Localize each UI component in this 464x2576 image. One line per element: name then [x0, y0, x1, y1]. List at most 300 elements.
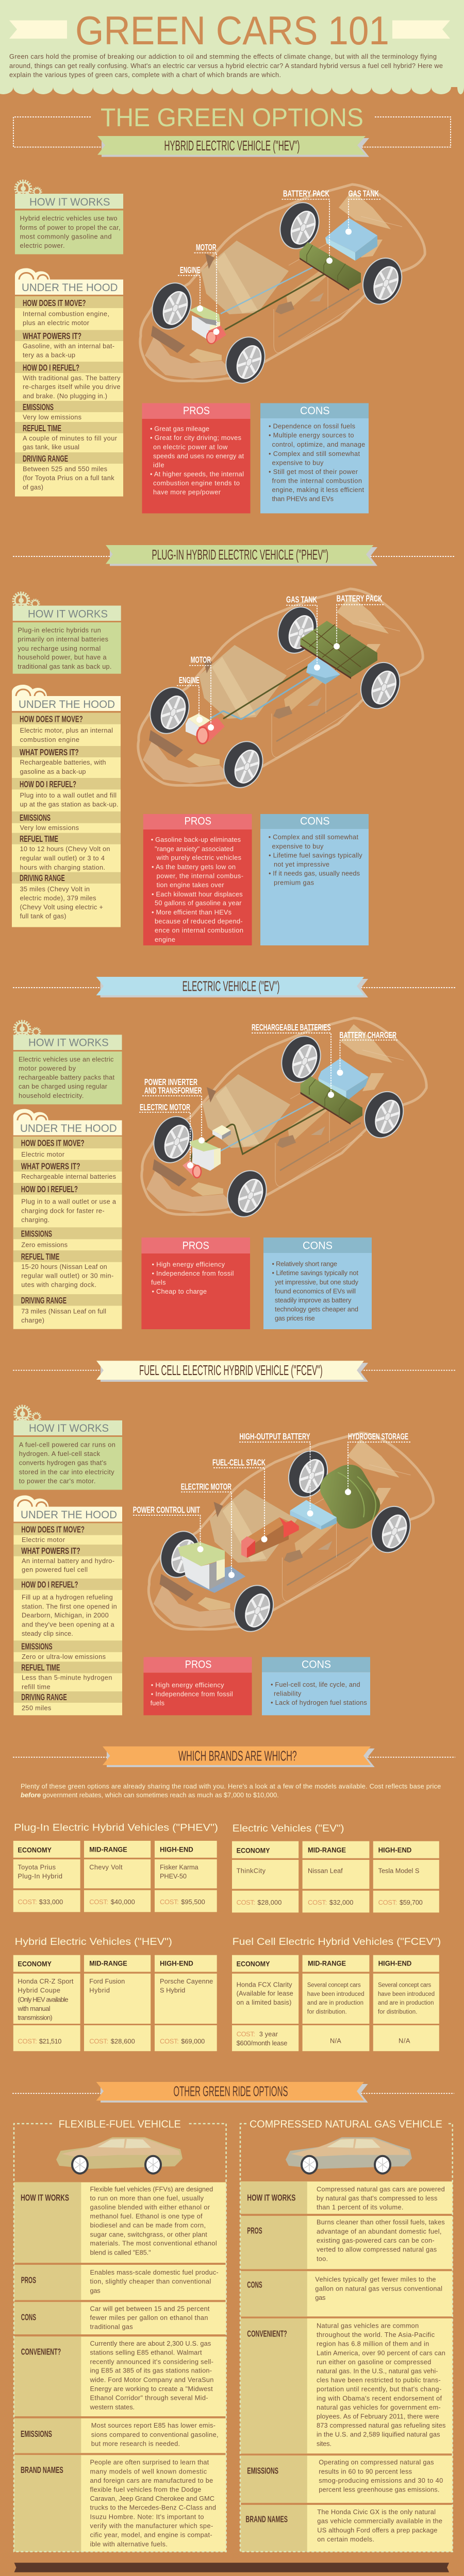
callout: battery charger: BATTERY CHARGER — [339, 1030, 396, 1040]
panel: compressed natural gas vehicle — [240, 2119, 453, 2552]
component: battery pack — [301, 621, 377, 679]
panel: HEV under the hood: DRIVING RANGE — [23, 453, 68, 464]
rows: flex-fuel table: stations selling E85 ethanol. Walmart — [90, 2349, 202, 2357]
callout: electric motor — [139, 1102, 193, 1168]
table: PHEV brands: COST: — [89, 1898, 108, 1906]
panel: EV under the hood: REFUEL TIME — [21, 1251, 59, 1262]
rows: CNG table: on certain models. — [317, 2535, 374, 2543]
panel: HEV under the hood: HOW DOES IT MOVE? — [23, 298, 86, 308]
rows: flex-fuel table: Isuzu Hombre. Note: It's important to — [90, 2513, 204, 2520]
panel: EV under the hood: WHAT POWERS IT? — [21, 1161, 80, 1171]
banner: plug-in hybrid electric vehicle: PLUG-IN HYBRID ELECTRIC VEHICLE ("PHEV") — [152, 547, 328, 563]
icon: CNG car — [286, 2137, 412, 2174]
panel: FCEV cons: • Fuel-cell cost, life cycle, and — [271, 1681, 360, 1688]
rows: flex-fuel table: materials. The most conventional ethanol — [90, 2240, 217, 2247]
callout: engine — [177, 675, 203, 723]
rows: flex-fuel table: blend is called "E85." — [90, 2248, 151, 2256]
heading: CNG: COMPRESSED NATURAL GAS VEHICLE — [250, 2119, 442, 2130]
rows: CNG table: CONS — [247, 2280, 262, 2290]
panel: FCEV under the hood: refill time — [22, 1683, 51, 1690]
table: PHEV brands — [13, 1823, 218, 1912]
rows: CNG table: gas vehicle commercially available in the — [317, 2517, 442, 2525]
panel: HEV cons: • Still get most of their power — [269, 468, 358, 476]
panel: PHEV under the hood: WHAT POWERS IT? — [20, 747, 79, 757]
panel: PHEV cons: CONS — [300, 815, 330, 827]
table: FCEV brands: ECONOMY — [237, 1960, 270, 1968]
panel: EV under the hood: Plug in to a wall outlet or use a — [21, 1198, 117, 1206]
panel: HEV pros: • Great for city driving; moves — [150, 434, 241, 442]
rows: CNG table: by natural gas that's compressed to less — [317, 2194, 437, 2202]
callout: hydrogen storage: HYDROGEN STORAGE — [348, 1431, 408, 1442]
banner: other green ride options: OTHER GREEN RIDE OPTIONS — [173, 2083, 288, 2099]
panel: FCEV under the hood: Fill up at a hydrogen refueling — [22, 1594, 113, 1601]
banner: hybrid electric vehicle — [97, 136, 369, 157]
banner: hybrid electric vehicle: HYBRID ELECTRIC VEHICLE ("HEV") — [164, 138, 300, 154]
component: fuel-cell stack — [241, 1517, 299, 1558]
rows: CNG table: throughout the world. The Asia-Pacific — [317, 2331, 435, 2338]
rows: flex-fuel table: recently announced it's considering sell- — [90, 2358, 213, 2365]
table: PHEV brands: ECONOMY — [18, 1845, 52, 1854]
table: PHEV brands: MID-RANGE — [89, 1845, 127, 1853]
callout: engine: ENGINE — [180, 265, 201, 275]
panel: PHEV pros: with purely electric vehicles — [156, 854, 241, 861]
table: EV brands: $59,700 — [400, 1899, 423, 1906]
rows: CNG table: run either on gasoline or compressed — [317, 2358, 431, 2366]
rows: CNG table: Burns cleaner than other fossil fuels, takes — [317, 2218, 445, 2226]
panel: FCEV under the hood: steady clip since. — [22, 1630, 73, 1637]
rows: flex-fuel table: cific year, model, and engine is compat- — [90, 2531, 212, 2539]
panel: EV under the hood — [13, 1109, 122, 1329]
panel: EV how it works: HOW IT WORKS — [28, 1037, 109, 1049]
panel: PHEV how it works: HOW IT WORKS — [28, 608, 108, 620]
panel: FCEV under the hood — [13, 1495, 122, 1715]
rows: flex-fuel table: sions compared to conventional gasoline, — [91, 2431, 219, 2438]
rows: CNG table: CONVENIENT? — [247, 2328, 287, 2338]
rows: CNG table: portation until recently, but that's chang- — [317, 2385, 441, 2393]
table: FCEV brands: N/A — [399, 2037, 410, 2044]
panel: PHEV pros: engine — [155, 936, 175, 943]
panel: PHEV under the hood: 10 to 12 hours (Chevy Volt on — [20, 845, 110, 853]
rows: flex-fuel table: many models of well known domestic — [90, 2467, 207, 2475]
panel: FCEV under the hood: Zero or ultra-low emissions — [22, 1653, 106, 1660]
rows: CNG table: results in 60 to 90 percent less — [319, 2467, 412, 2475]
panel: EV how it works — [13, 1021, 122, 1105]
panel: EV cons: • Lifetime savings typically not — [272, 1269, 358, 1277]
callout: motor: MOTOR — [196, 242, 217, 252]
rows: flex-fuel table: Caravan, Jeep Grand Cherokee and GMC — [90, 2495, 214, 2502]
table: HEV brands: Hybrid Coupe — [18, 1987, 60, 1994]
panel: HEV cons: • Complex and still somewhat — [269, 450, 360, 457]
panel: EV cons: gas prices rise — [275, 1314, 315, 1322]
panel: HEV cons: CONS — [300, 405, 330, 417]
callout: power control unit — [133, 1504, 204, 1552]
panel: EV under the hood: utes with charging dock. — [21, 1281, 96, 1289]
callout: gas tank — [286, 595, 320, 671]
rows: CNG table: smog-producing emissions and 30 to 40 — [319, 2477, 443, 2484]
callout: high-output battery — [239, 1431, 313, 1517]
panel: EV under the hood: Rechargeable internal batteries — [21, 1173, 116, 1180]
panel: PHEV under the hood: DRIVING RANGE — [20, 873, 65, 883]
rows: flex-fuel table: wide. Ford Motor Company and VeraSun — [90, 2376, 213, 2383]
panel: HEV under the hood: Very low emissions — [23, 413, 81, 421]
table: FCEV brands: Several concept cars — [378, 1982, 432, 1989]
table: PHEV brands: Chevy Volt — [89, 1863, 123, 1871]
callout: electric motor — [181, 1482, 235, 1578]
table: PHEV brands: Fisker Karma — [160, 1863, 198, 1871]
component: power control unit — [178, 1542, 245, 1593]
rows: CNG table: EMISSIONS — [247, 2466, 278, 2476]
banner: other green ride options — [12, 2082, 454, 2103]
panel: FCEV under the hood: gen powered fuel cell — [22, 1566, 88, 1573]
panel: EV cons: technology gets cheaper and — [275, 1306, 358, 1313]
component: engine — [190, 305, 220, 341]
component: motor — [197, 718, 225, 744]
panel: FCEV cons: • Lack of hydrogen fuel stations — [271, 1699, 367, 1706]
table: FCEV brands: and are in production — [378, 2000, 434, 2006]
text: brands intro: Plenty of these green options are already sharing the road with you. Here's a look at a few of the models available. Cost reflects base price — [21, 1782, 441, 1790]
panel: PHEV under the hood: gasoline as a back-up — [20, 768, 86, 775]
table: EV brands: COST: — [378, 1899, 397, 1906]
panel: HEV how it works: HOW IT WORKS — [29, 196, 110, 208]
panel: PHEV under the hood: REFUEL TIME — [20, 834, 58, 844]
callout: gas tank — [345, 189, 380, 235]
rows: flex-fuel table: Car will get between 15 and 25 percent — [90, 2304, 210, 2312]
panel: EV cons: found economics of EVs will — [275, 1287, 356, 1295]
table: FCEV brands: $600/month lease — [237, 2039, 287, 2047]
rows: CNG table: 873 compressed natural gas refueling sites — [317, 2421, 445, 2429]
rows: CNG table: too. — [317, 2255, 328, 2262]
table: PHEV brands: $95,500 — [181, 1898, 205, 1906]
rows: flex-fuel table: biodiesel and can be made from corn, — [90, 2222, 206, 2229]
panel: HEV how it works — [15, 181, 123, 255]
title: GREEN CARS 101 — [75, 8, 389, 53]
component: gas tank — [325, 218, 377, 261]
panel: PHEV cons: premium gas — [274, 879, 314, 887]
panel: PHEV how it works: Plug-in electric hybrids run — [18, 626, 101, 634]
panel: FCEV under the hood: An internal battery and hydro- — [22, 1557, 114, 1565]
banner: plug-in hybrid electric vehicle — [13, 545, 455, 566]
rows: CNG table: ing with Obama's recent endorsement of — [317, 2394, 442, 2402]
rows: flex-fuel table — [14, 2182, 226, 2552]
panel: EV how it works: motor powered by — [19, 1064, 76, 1072]
table: FCEV brands: Several concept cars — [307, 1982, 361, 1989]
panel: PHEV pros: PROS — [185, 815, 211, 827]
panel: PHEV pros: 50 gallons of gasoline a year — [155, 899, 242, 907]
table: FCEV brands: have been introduced — [307, 1991, 364, 1997]
panel: EV cons: steadily improve as battery — [275, 1296, 352, 1304]
panel: EV pros: • Independence from fossil — [152, 1269, 234, 1277]
component: transformer — [212, 1125, 231, 1140]
rows: flex-fuel table: sugar cane, switchgrass, or other plant — [90, 2230, 207, 2238]
panel: EV cons: • Relatively short range — [272, 1260, 337, 1268]
panel: HEV cons: • Multiple energy sources to — [269, 431, 354, 439]
panel: FCEV under the hood: EMISSIONS — [21, 1641, 53, 1652]
callout: battery charger — [337, 1030, 397, 1076]
component: gas tank — [306, 656, 340, 684]
panel: PHEV under the hood: regular wall outlet) or 3 to 4 — [20, 854, 105, 862]
callout: electric motor: ELECTRIC MOTOR — [181, 1482, 231, 1492]
panel: EV pros — [141, 1238, 250, 1329]
heading: HEV: Hybrid Electric Vehicles ("HEV") — [15, 1937, 172, 1947]
rows: CNG table: natural gas. In the U.S., natural gas vehi- — [317, 2367, 438, 2375]
rows: CNG table: Natural gas vehicles are common — [317, 2321, 419, 2329]
rows: CNG table: existing gas-powered cars can be con- — [317, 2236, 435, 2244]
panel: HEV pros: combustion engine tends to — [153, 479, 240, 487]
panel: EV under the hood: Electric motor — [21, 1150, 65, 1158]
panel: PHEV pros: • As the battery gets low on — [152, 863, 236, 871]
panel: EV under the hood: 15-20 hours (Nissan Leaf on — [21, 1263, 107, 1270]
table: HEV brands: with manual — [17, 2005, 51, 2012]
callout: power inverter and transformer: POWER INVERTER — [144, 1077, 197, 1087]
heading: EV: Electric Vehicles ("EV") — [233, 1823, 344, 1834]
panel: HEV cons — [260, 403, 369, 513]
panel: HEV cons: engine, making it less efficient — [272, 486, 364, 494]
panel: HEV cons: • Dependence on fossil fuels — [269, 422, 355, 430]
component: battery pack — [300, 242, 361, 291]
panel: FCEV pros: PROS — [185, 1658, 211, 1670]
callout: rechargeable batteries — [252, 1022, 334, 1098]
table: FCEV brands: COST: — [237, 2030, 255, 2038]
table: FCEV brands: Honda FCX Clarity — [237, 1980, 292, 1988]
panel: PHEV how it works: traditional gas tank as back up. — [18, 663, 111, 670]
table: FCEV brands: HIGH-END — [378, 1959, 411, 1968]
panel: PHEV cons: • Complex and still somewhat — [269, 833, 358, 841]
icon: flex-fuel car — [56, 2137, 183, 2174]
panel: PHEV under the hood: combustion engine — [20, 736, 79, 743]
table: FCEV brands: MID-RANGE — [308, 1959, 346, 1968]
intro text: Green cars hold the promise of breaking our addiction to oil and stemming the effects of climate change, but with all the terminology flying — [9, 53, 437, 60]
table: HEV brands: ECONOMY — [18, 1960, 52, 1968]
component: rechargeable batteries — [301, 1076, 362, 1125]
table: FCEV brands: 3 year — [259, 2030, 278, 2038]
callout: engine — [178, 265, 203, 312]
rows: flex-fuel table: but more research is needed. — [91, 2440, 180, 2448]
callout: fuel-cell stack: FUEL-CELL STACK — [212, 1457, 266, 1467]
panel: FCEV how it works: to power the car's motor. — [19, 1477, 95, 1485]
panel: FCEV under the hood: HOW DO I REFUEL? — [21, 1579, 78, 1589]
rows: CNG table: percent less greenhouse gas emissions. — [319, 2485, 439, 2493]
rows: flex-fuel table: BRAND NAMES — [21, 2465, 63, 2475]
callout: power control unit: POWER CONTROL UNIT — [133, 1504, 200, 1515]
panel: PHEV under the hood: (Chevy Volt using electric + — [20, 903, 103, 911]
callout: power inverter and transformer: AND TRANSFORMER — [144, 1085, 202, 1095]
table: HEV brands: Hybrid — [89, 1987, 110, 1994]
rows: CNG table: BRAND NAMES — [245, 2514, 288, 2524]
callout: motor — [189, 655, 214, 731]
rows: flex-fuel table: gasoline blended with either ethanol or — [90, 2204, 210, 2211]
panel: EV under the hood: HOW DOES IT MOVE? — [21, 1138, 85, 1148]
panel: EV under the hood: UNDER THE HOOD — [20, 1123, 117, 1134]
panel: EV pros: PROS — [183, 1240, 209, 1251]
table: HEV brands: $69,000 — [181, 2037, 205, 2045]
rows: CNG table — [240, 2181, 453, 2552]
panel: FCEV under the hood: 250 miles — [22, 1704, 51, 1711]
panel: EV pros: • High energy efficiency — [152, 1260, 225, 1268]
panel: FCEV under the hood: UNDER THE HOOD — [21, 1509, 117, 1521]
rows: flex-fuel table: methanol fuel. Ethanol is one type of — [90, 2212, 203, 2220]
panel: PHEV cons — [260, 814, 369, 945]
panel: HEV cons: from the internal combustion — [272, 477, 362, 484]
panel: HEV under the hood: of gas) — [23, 483, 43, 491]
panel: FCEV cons: CONS — [302, 1658, 331, 1670]
panel: HEV pros — [142, 403, 251, 513]
table: PHEV brands: COST: — [160, 1898, 179, 1906]
callout: battery pack — [334, 594, 384, 649]
panel: PHEV cons: • Lifetime fuel savings typically — [269, 851, 362, 859]
panel: EV under the hood: 73 miles (Nissan Leaf on full — [21, 1307, 106, 1315]
rows: CNG table: Compressed natural gas cars are powered — [317, 2185, 445, 2193]
rows: flex-fuel table: Ethanol Corridor" through several Mid- — [90, 2394, 208, 2402]
callout: battery pack — [281, 189, 333, 264]
panel: HEV under the hood: Internal combustion engine, — [23, 310, 109, 318]
panel: EV pros: • Cheap to charge — [152, 1287, 207, 1295]
heading: PHEV: Plug-In Electric Hybrid Vehicles ("PHEV") — [14, 1823, 218, 1834]
panel: HEV under the hood: EMISSIONS — [23, 402, 54, 412]
table: EV brands: HIGH-END — [378, 1845, 411, 1854]
panel: HEV under the hood: A couple of minutes to fill your — [23, 434, 118, 442]
table: HEV brands: Honda CR-Z Sport — [18, 1977, 74, 1985]
panel: FCEV under the hood: Less than 5-minute hydrogen — [22, 1674, 112, 1682]
rows: flex-fuel table: traditional gas — [90, 2323, 133, 2331]
panel: FCEV under the hood: DRIVING RANGE — [21, 1692, 67, 1702]
intro text: explain the various types of green cars, complete with a chart of which brands are which. — [9, 71, 281, 78]
panel: HEV pros: • At higher speeds, the internal — [150, 470, 244, 478]
panel: PHEV under the hood: Rechargeable batteries, with — [20, 758, 106, 766]
panel: EV under the hood: charging. — [21, 1216, 49, 1224]
panel: FCEV how it works: converts hydrogen gas that's — [19, 1459, 107, 1467]
diagram: HEV car — [140, 184, 425, 389]
callout: power inverter and transformer — [142, 1077, 205, 1144]
banner: fuel cell electric hybrid vehicle — [13, 1361, 455, 1382]
callout: motor: MOTOR — [191, 655, 211, 665]
panel: FCEV pros — [143, 1657, 252, 1715]
callout: motor — [194, 242, 220, 335]
table: HEV brands: (Only HEV available — [18, 1995, 69, 2003]
callout: electric motor: ELECTRIC MOTOR — [140, 1102, 190, 1112]
panel: PHEV under the hood — [12, 685, 121, 927]
component: engine — [186, 714, 210, 738]
callout: engine: ENGINE — [179, 675, 200, 685]
panel: flexible-fuel vehicle — [14, 2119, 226, 2552]
panel: HEV under the hood — [15, 268, 123, 497]
rows: flex-fuel table: tion, slightly cheaper than conventional — [90, 2278, 211, 2285]
panel: HEV cons: than PHEVs and EVs — [272, 495, 334, 503]
panel: PHEV cons: expensive to buy — [272, 842, 324, 850]
rows: CNG table: in the U.S. and 2,589 liquified natural gas — [317, 2431, 440, 2438]
panel: FCEV how it works: A fuel-cell powered car runs on — [19, 1440, 115, 1449]
table: EV brands: ThinkCity — [237, 1867, 266, 1874]
component: motor — [207, 326, 226, 344]
callout: battery pack: BATTERY PACK — [337, 594, 383, 604]
diagram: PHEV car — [138, 589, 423, 793]
rows: flex-fuel table: Flexible fuel vehicles (FFVs) are designed — [90, 2185, 213, 2193]
panel: PHEV pros: ence on internal combustion — [155, 926, 243, 934]
panel: EV cons: yet impressive, but one study — [275, 1278, 359, 1286]
table: FCEV brands: (Available for lease — [237, 1990, 293, 1997]
text: brands intro — [21, 1782, 441, 1799]
panel: EV pros: fuels — [151, 1279, 166, 1286]
panel: PHEV pros: • Gasoline back-up eliminates — [151, 836, 241, 843]
table: FCEV brands: on a limited basis) — [237, 1998, 291, 2006]
rows: CNG table: cles have been restricted to public trans- — [317, 2376, 441, 2384]
rows: CNG table: Latin America, over 90 percent of cars can — [317, 2349, 445, 2357]
panel: FCEV cons — [262, 1657, 370, 1715]
rows: flex-fuel table: to run on more than one fuel, usually — [90, 2194, 204, 2202]
panel: PHEV pros: • Each kilowatt hour displaces — [152, 890, 243, 898]
rows: CNG table: gas — [315, 2294, 325, 2301]
callout: high-output battery: HIGH-OUTPUT BATTERY — [239, 1431, 310, 1442]
component: high-output battery — [290, 1500, 337, 1530]
panel: PHEV under the hood: EMISSIONS — [20, 812, 51, 823]
panel: FCEV pros: • High energy efficiency — [151, 1681, 224, 1689]
panel: PHEV under the hood: Very low emissions — [20, 824, 79, 832]
rows: CNG table: Vehicles typically get fewer miles to the — [315, 2275, 436, 2283]
table: PHEV brands: COST: — [18, 1898, 37, 1906]
panel: PHEV how it works — [13, 593, 121, 674]
rows: flex-fuel table: ible with alternative fuels. — [90, 2540, 168, 2548]
panel: HEV pros: speeds and uses no energy at — [153, 452, 244, 460]
panel: PHEV pros: • More efficient than HEVs — [152, 908, 231, 916]
component: hydrogen storage — [314, 1458, 386, 1535]
panel: EV under the hood: charging dock for faster re- — [21, 1207, 105, 1214]
table: HEV brands: $21,510 — [39, 2037, 61, 2045]
table: EV brands: $28,000 — [257, 1899, 281, 1906]
panel: EV how it works: rechargeable battery packs that — [19, 1074, 114, 1081]
table: FCEV brands: for distribution. — [307, 2009, 347, 2015]
panel: FCEV under the hood: station. The first one opened in — [22, 1602, 117, 1610]
rows: CNG table: gallon on natural gas versus conventional — [315, 2284, 442, 2292]
table: HEV brands: COST: — [89, 2037, 108, 2045]
component: electric motor — [183, 1160, 202, 1178]
rows: CNG table: US although Ford offers a prep package — [317, 2526, 437, 2534]
table: HEV brands: COST: — [160, 2037, 179, 2045]
table: PHEV brands: Toyota Prius — [18, 1863, 56, 1871]
table: FCEV brands: for distribution. — [378, 2009, 417, 2015]
panel: HEV pros: have more pep/power — [153, 488, 221, 496]
panel: EV how it works: Electric vehicles use an electric — [19, 1055, 114, 1063]
table: FCEV brands: and are in production — [307, 2000, 363, 2006]
table: EV brands: COST: — [237, 1899, 255, 1906]
panel: PHEV cons: not yet impressive — [274, 860, 329, 868]
panel: PHEV pros — [143, 814, 252, 945]
banner: electric vehicle: ELECTRIC VEHICLE ("EV") — [183, 978, 279, 994]
rows: flex-fuel table: Currently there are about 2,300 U.S. gas — [90, 2340, 211, 2347]
rows: flex-fuel table: verify with the manufacturer which spe- — [90, 2522, 213, 2530]
panel: HEV under the hood: With traditional gas. The battery — [23, 374, 121, 382]
rows: flex-fuel table: CONVENIENT? — [21, 2347, 61, 2357]
panel: EV under the hood: HOW DO I REFUEL? — [21, 1184, 78, 1194]
table: EV brands: MID-RANGE — [308, 1845, 346, 1854]
rows: CNG table: verted to allow compressed natural gas — [317, 2246, 437, 2253]
banner: which brands are which — [13, 1747, 455, 1767]
table: PHEV brands: PHEV-50 — [160, 1872, 187, 1880]
callout: battery pack: BATTERY PACK — [283, 189, 329, 199]
header panel — [0, 0, 464, 94]
panel: PHEV under the hood: 35 miles (Chevy Volt in — [20, 885, 90, 893]
panel: HEV under the hood: and brake. (No plugging in.) — [23, 392, 107, 400]
rows: flex-fuel table: Most sources report E85 has lower emis- — [91, 2421, 216, 2429]
callout: gas tank: GAS TANK — [349, 189, 379, 199]
panel: FCEV how it works — [13, 1406, 122, 1490]
panel: EV under the hood: charge) — [21, 1316, 44, 1324]
rows: flex-fuel table: Energy are working to create a "Midwest — [90, 2385, 213, 2393]
table: EV brands: ECONOMY — [237, 1846, 270, 1854]
component: power inverter — [189, 1139, 221, 1171]
panel: PHEV pros: power, the internal combus- — [157, 872, 243, 880]
panel: PHEV under the hood: Electric motor, plus an internal — [20, 726, 113, 734]
rows: flex-fuel table: fewer miles per gallon on ethanol than — [90, 2314, 208, 2321]
table: HEV brands: COST: — [18, 2037, 37, 2045]
